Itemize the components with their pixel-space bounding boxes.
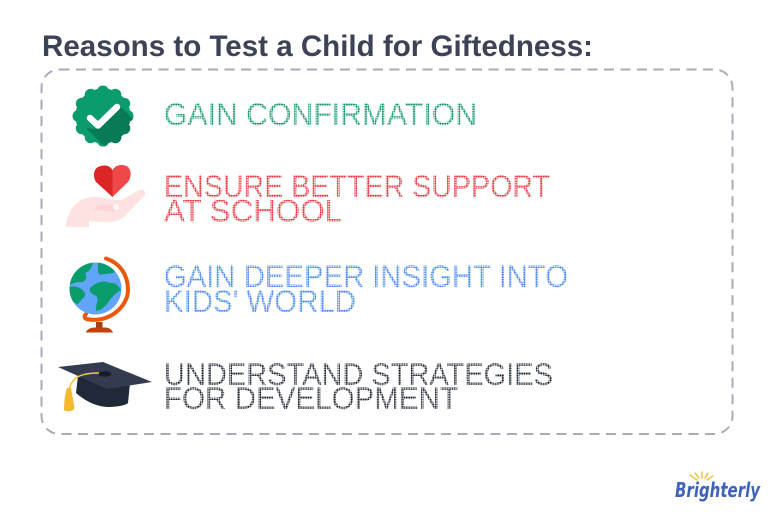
reason 4 text: UNDERSTAND STRATEGIES bbox=[164, 356, 553, 392]
reason 4 text: FOR DEVELOPMENT bbox=[164, 380, 458, 416]
reason 2 text: ENSURE BETTER SUPPORT bbox=[164, 168, 550, 204]
icon: heart over open hand bbox=[66, 165, 145, 227]
reason 3 text bbox=[164, 258, 568, 319]
icon: graduation cap bbox=[58, 362, 152, 411]
icon: green check badge bbox=[72, 86, 134, 146]
panel: reasons dashed frame bbox=[42, 70, 732, 434]
reason 3 text: KIDS' WORLD bbox=[164, 283, 356, 319]
reason 2 text: AT SCHOOL bbox=[164, 192, 342, 228]
reason 3 text: GAIN DEEPER INSIGHT INTO bbox=[164, 258, 568, 294]
reason 2 text bbox=[164, 168, 550, 228]
icon: globe on stand bbox=[69, 258, 128, 332]
reason 4 text bbox=[164, 356, 553, 416]
title: Reasons to Test a Child for Giftedness: bbox=[42, 30, 593, 63]
reason 1 text: GAIN CONFIRMATION bbox=[164, 96, 477, 132]
